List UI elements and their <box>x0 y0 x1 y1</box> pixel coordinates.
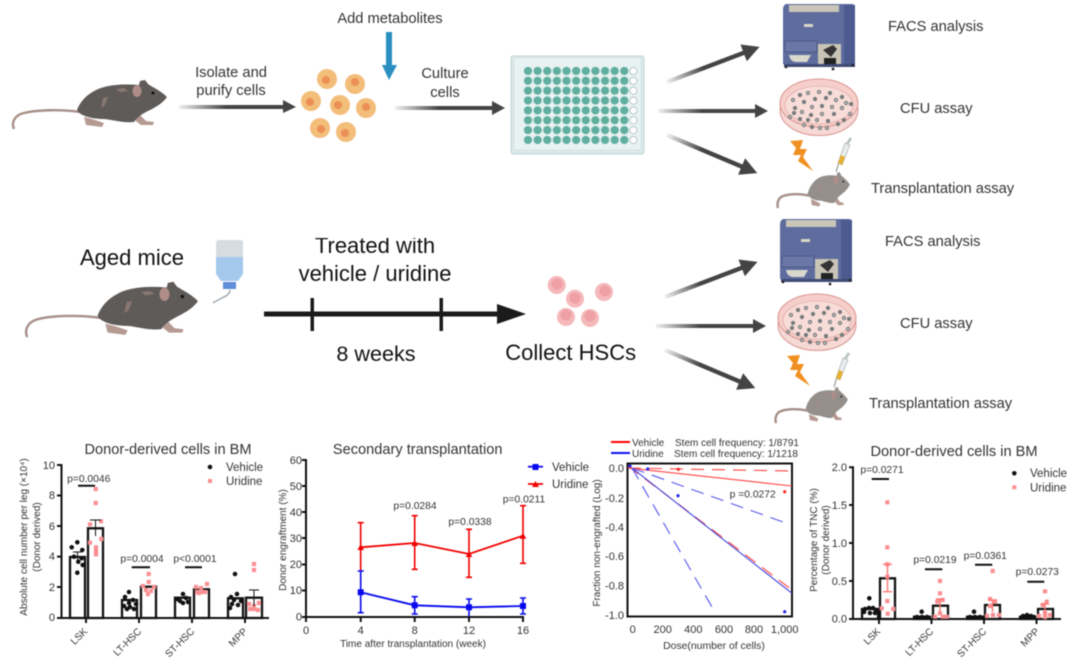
x axis ticks: 800 <box>745 624 763 636</box>
significance: LSK: p=0.0271 <box>860 465 904 476</box>
y axis ticks: -1.0 <box>605 610 624 622</box>
panel: limiting dilution plot <box>592 438 799 652</box>
y axis ticks: 8 <box>49 490 55 502</box>
text: isolate and purify cells: purify cells <box>196 83 266 99</box>
text: FACS analysis: FACS analysis <box>888 19 984 35</box>
panel: top workflow <box>13 4 1015 208</box>
arrow: to FACS <box>662 253 761 305</box>
icon: FACS machine <box>783 4 855 70</box>
y axis ticks: 60 <box>290 455 302 467</box>
text: isolate and purify cells: Isolate and <box>195 65 267 81</box>
icon: irradiation bolt <box>787 355 810 386</box>
y axis label: Absolute cell number per leg (×10⁴) <box>19 458 30 616</box>
x axis labels: LT-HSC <box>904 626 936 659</box>
chart title: Secondary transplantation <box>333 442 502 458</box>
vehicle points <box>72 542 241 609</box>
significance: LSK: p=0.0046 <box>67 474 111 485</box>
text: treated with vehicle / uridine: vehicle / uridine <box>299 261 451 286</box>
legend: Uridine <box>632 449 664 460</box>
text: culture cells: Culture <box>421 66 469 82</box>
x axis labels: LSK <box>69 626 90 647</box>
x axis labels <box>69 626 250 660</box>
plot frame <box>628 464 792 616</box>
axes <box>57 465 269 623</box>
y axis label: Percentage of TNC (%) <box>809 488 820 592</box>
x axis labels: MPP <box>227 626 250 649</box>
y axis ticks: -0.6 <box>605 551 624 563</box>
arrow: metabolites <box>382 32 397 80</box>
y axis ticks <box>43 460 55 624</box>
chart title: Donor-derived cells in BM <box>84 442 252 458</box>
text: add metabolites: Add metabolites <box>337 11 443 27</box>
vehicle points <box>864 598 1034 617</box>
significance: ST-HSC: p=0.0361 <box>964 551 1007 562</box>
x axis tick labels: 16 <box>517 625 529 637</box>
bars <box>862 578 1053 619</box>
panel: percentage of TNC bar chart <box>809 444 1067 660</box>
icon: irradiation bolt <box>790 140 813 171</box>
legend <box>528 462 589 491</box>
p values <box>393 495 546 528</box>
icon: syringe <box>834 353 849 387</box>
y axis ticks: 0 <box>296 612 302 624</box>
icon: syringe <box>836 138 851 172</box>
y axis ticks: 1.5 <box>832 500 847 512</box>
x axis ticks <box>630 624 798 636</box>
y axis ticks: 2.0 <box>832 462 847 474</box>
x axis labels: ST-HSC <box>163 626 197 660</box>
p values: p=0.0338 <box>448 517 492 528</box>
p value: p =0.0272 <box>730 490 776 501</box>
significance: MPP: p=0.0273 <box>1016 567 1059 578</box>
legend: Uridine <box>552 479 588 491</box>
y axis ticks: 30 <box>290 533 302 545</box>
y axis ticks: 0.5 <box>832 576 847 588</box>
x axis ticks: 200 <box>654 624 672 636</box>
y axis label: Fraction non-engrafted (Log) <box>592 479 603 607</box>
icon: recipient mouse <box>776 387 848 423</box>
x axis labels: MPP <box>1019 626 1042 649</box>
p values: p=0.0284 <box>393 501 437 512</box>
legend: Uridine <box>1030 482 1066 494</box>
error bars <box>883 564 1049 614</box>
panel: aged mice workflow <box>26 219 1013 423</box>
text: transplantation assay: Transplantation assay <box>871 181 1015 197</box>
text: CFU assay: CFU assay <box>900 101 973 117</box>
y axis ticks: 10 <box>43 460 55 472</box>
icon: CFU dish <box>778 294 856 350</box>
data points <box>628 464 786 613</box>
significance: ST-HSC: p<0.0001 <box>173 554 217 565</box>
panel: absolute cell number bar chart <box>19 442 269 660</box>
y axis ticks: 0.0 <box>609 463 624 475</box>
text: collect HSCs: Collect HSCs <box>505 340 636 365</box>
x axis labels: LT-HSC <box>112 626 144 659</box>
y axis ticks: -0.8 <box>605 580 624 592</box>
x axis tick labels: 4 <box>358 625 364 637</box>
error bars <box>73 520 259 606</box>
legend: Vehicle <box>226 462 263 474</box>
y axis ticks: 0 <box>49 612 55 624</box>
text: FACS analysis: FACS analysis <box>885 234 981 250</box>
legend <box>611 438 799 460</box>
y axis ticks: 2 <box>49 582 55 594</box>
icon: aged mouse <box>26 282 198 337</box>
y axis ticks: 40 <box>290 507 302 519</box>
text: culture cells: cells <box>430 85 460 101</box>
icon: water bottle <box>213 240 243 303</box>
legend: Stem cell frequency: 1/8791 <box>675 438 799 449</box>
legend: Vehicle <box>632 438 665 449</box>
x axis ticks: 400 <box>684 624 702 636</box>
p values: p=0.0211 <box>503 495 546 506</box>
arrow: culture <box>395 101 505 115</box>
icon: recipient mouse <box>778 172 850 208</box>
panel: secondary transplantation line chart <box>278 442 589 650</box>
x axis ticks: 1,000 <box>771 624 798 636</box>
arrow: to transplant <box>663 127 761 181</box>
x axis labels: ST-HSC <box>955 626 989 660</box>
x axis tick labels: 0 <box>303 625 309 637</box>
arrow: isolate <box>179 100 296 113</box>
y axis ticks <box>290 455 302 624</box>
icon: CFU dish <box>780 79 858 136</box>
x axis labels: LSK <box>862 626 883 647</box>
text: CFU assay: CFU assay <box>900 316 973 332</box>
icon: FACS machine <box>780 219 852 285</box>
bars <box>70 528 262 618</box>
series: uridine <box>357 506 526 577</box>
x axis ticks: 600 <box>715 624 733 636</box>
y axis ticks: 4 <box>49 551 55 563</box>
legend <box>1012 468 1067 494</box>
x axis title: Dose(number of cells) <box>663 641 765 652</box>
y axis label: (Donor derived) <box>821 505 832 575</box>
chart title: Donor-derived cells in BM <box>870 444 1038 460</box>
significance: LT-HSC: p=0.0004 <box>120 554 164 565</box>
icon: young mouse <box>13 80 167 129</box>
x axis tick labels: 12 <box>463 625 475 637</box>
text: treated with vehicle / uridine: Treated with <box>315 233 435 258</box>
arrow: to CFU <box>656 319 766 333</box>
y axis ticks <box>605 463 624 622</box>
legend: Vehicle <box>552 462 589 474</box>
y axis label: Donor engraftment (%) <box>278 489 289 591</box>
arrow: to transplant <box>661 342 759 396</box>
y axis label: (Donor derived) <box>32 502 43 572</box>
text: 8 weeks: 8 weeks <box>336 341 416 366</box>
icon: 96-well plate <box>511 56 644 154</box>
axes <box>302 460 524 622</box>
y axis ticks: 50 <box>290 481 302 493</box>
fit lines <box>628 466 792 608</box>
significance: LT-HSC: p=0.0219 <box>913 555 957 566</box>
legend <box>208 462 263 488</box>
y axis ticks: 20 <box>290 559 302 571</box>
arrow: timeline <box>264 298 526 331</box>
x axis ticks: 0 <box>630 624 636 636</box>
uridine points <box>90 489 259 610</box>
x axis title: Time after transplantation (week) <box>340 639 486 650</box>
arrow: to FACS <box>664 38 763 90</box>
y axis ticks: 6 <box>49 521 55 533</box>
heading: aged mice: Aged mice <box>80 245 184 270</box>
arrow: to CFU <box>658 104 768 118</box>
text: transplantation assay: Transplantation assay <box>869 396 1013 412</box>
uridine points <box>882 502 1050 617</box>
axes <box>849 467 1061 624</box>
x axis tick labels <box>303 625 529 637</box>
legend: Uridine <box>226 476 262 488</box>
y axis ticks: 10 <box>290 585 302 597</box>
y axis ticks: 1.0 <box>832 538 847 550</box>
series: vehicle <box>358 571 526 617</box>
y axis ticks <box>832 462 847 626</box>
legend: Vehicle <box>1030 468 1067 480</box>
y axis ticks: 0.0 <box>832 614 847 626</box>
icon: HSC cells <box>548 276 613 327</box>
icon: orange cells <box>301 69 376 142</box>
x axis labels <box>862 626 1042 660</box>
legend: Stem cell frequency: 1/1218 <box>674 449 798 460</box>
y axis ticks: -0.4 <box>605 522 624 534</box>
x axis tick labels: 8 <box>412 625 418 637</box>
y axis ticks: -0.2 <box>605 493 624 505</box>
